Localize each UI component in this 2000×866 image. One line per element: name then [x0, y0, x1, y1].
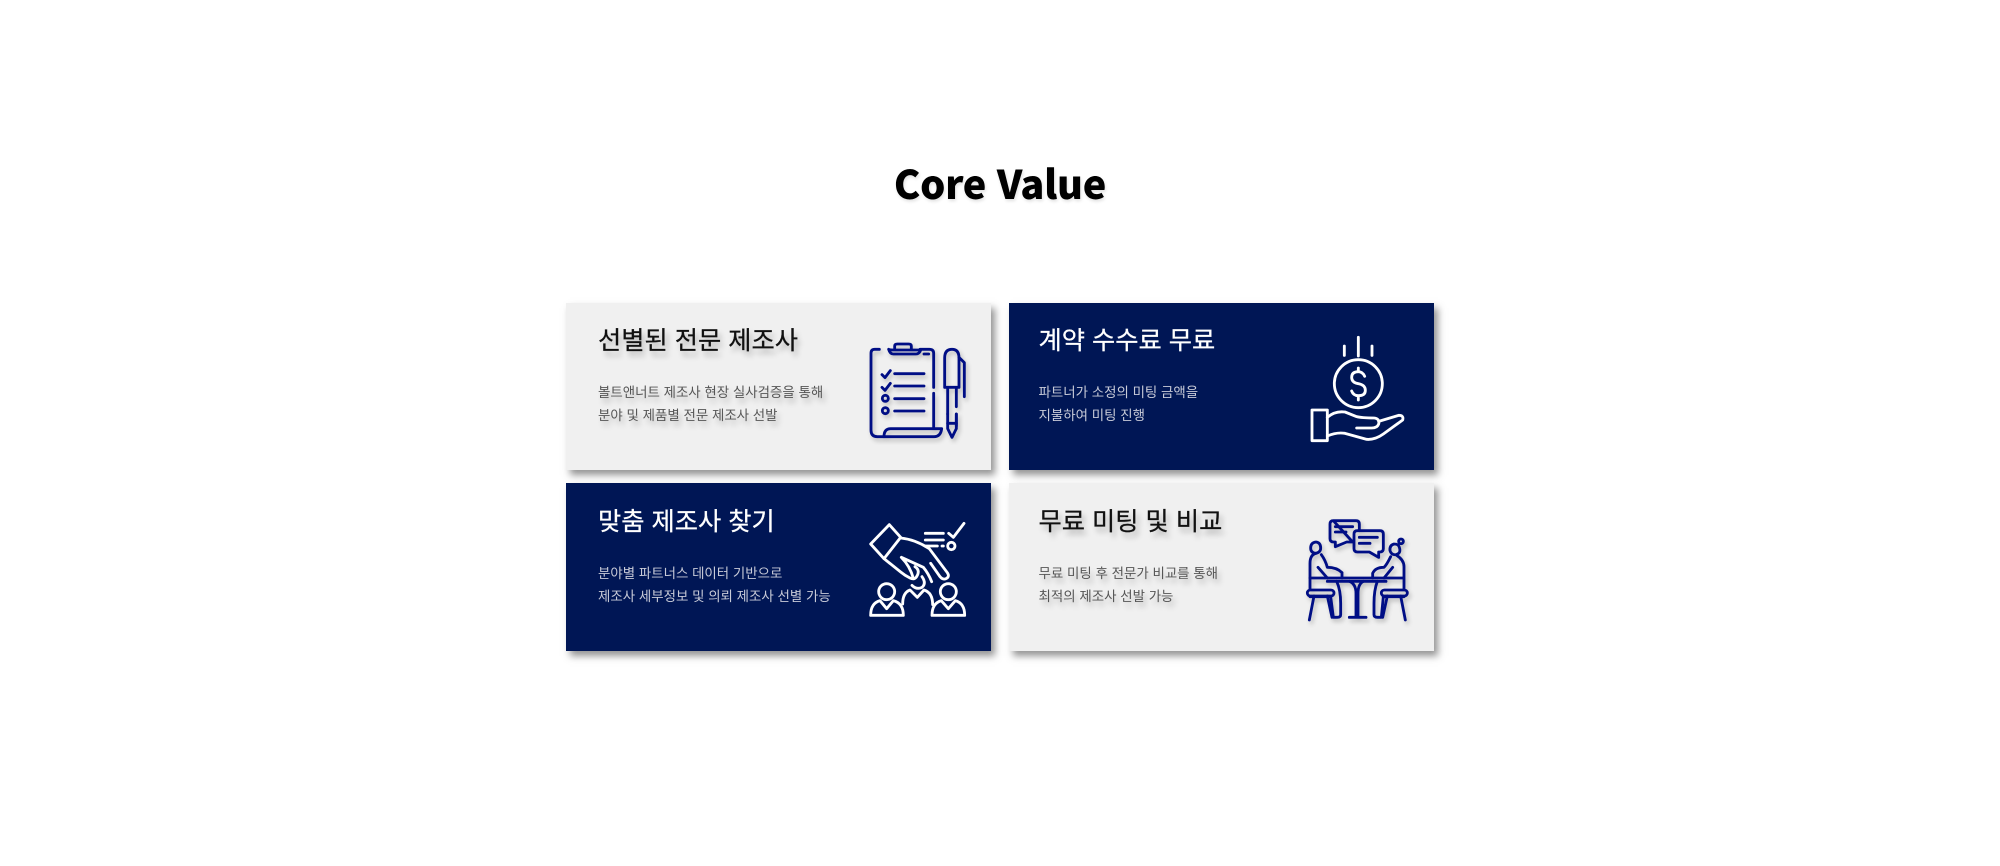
panel: selected manufacturers — [566, 303, 991, 470]
heading: 선별된 전문 제조사 — [598, 321, 798, 357]
icon: two people meeting — [1306, 519, 1412, 625]
heading: 계약 수수료 무료 — [1038, 321, 1215, 357]
icon: hand with coin — [1310, 336, 1404, 442]
panel: custom manufacturer search — [566, 483, 991, 651]
text block: 무료 미팅 후 전문가 비교를 통해 — [1038, 562, 1218, 582]
text block: 제조사 세부정보 및 의뢰 제조사 선별 가능 — [598, 585, 831, 605]
text block: 지불하여 미팅 진행 — [1038, 404, 1145, 424]
icon: hand picking people — [869, 522, 966, 617]
text block: 파트너가 소정의 미팅 금액을 — [1038, 381, 1198, 401]
text block — [1038, 381, 1198, 424]
text block: 분야 및 제품별 전문 제조사 선발 — [598, 404, 778, 424]
heading: 무료 미팅 및 비교 — [1038, 502, 1222, 538]
text block: 분야별 파트너스 데이터 기반으로 — [598, 562, 782, 582]
text block: 볼트앤너트 제조사 현장 실사검증을 통해 — [598, 381, 823, 401]
text block — [1038, 562, 1222, 608]
text block — [598, 562, 831, 605]
panel: free meeting and comparison — [1009, 483, 1434, 651]
heading: 맞춤 제조사 찾기 — [598, 502, 775, 538]
panel: no contract fee — [1009, 303, 1434, 470]
text block — [598, 381, 826, 427]
text block: 최적의 제조사 선발 가능 — [1038, 585, 1173, 605]
icon: clipboard and pen — [870, 342, 970, 444]
title: Core Value — [894, 154, 1106, 211]
